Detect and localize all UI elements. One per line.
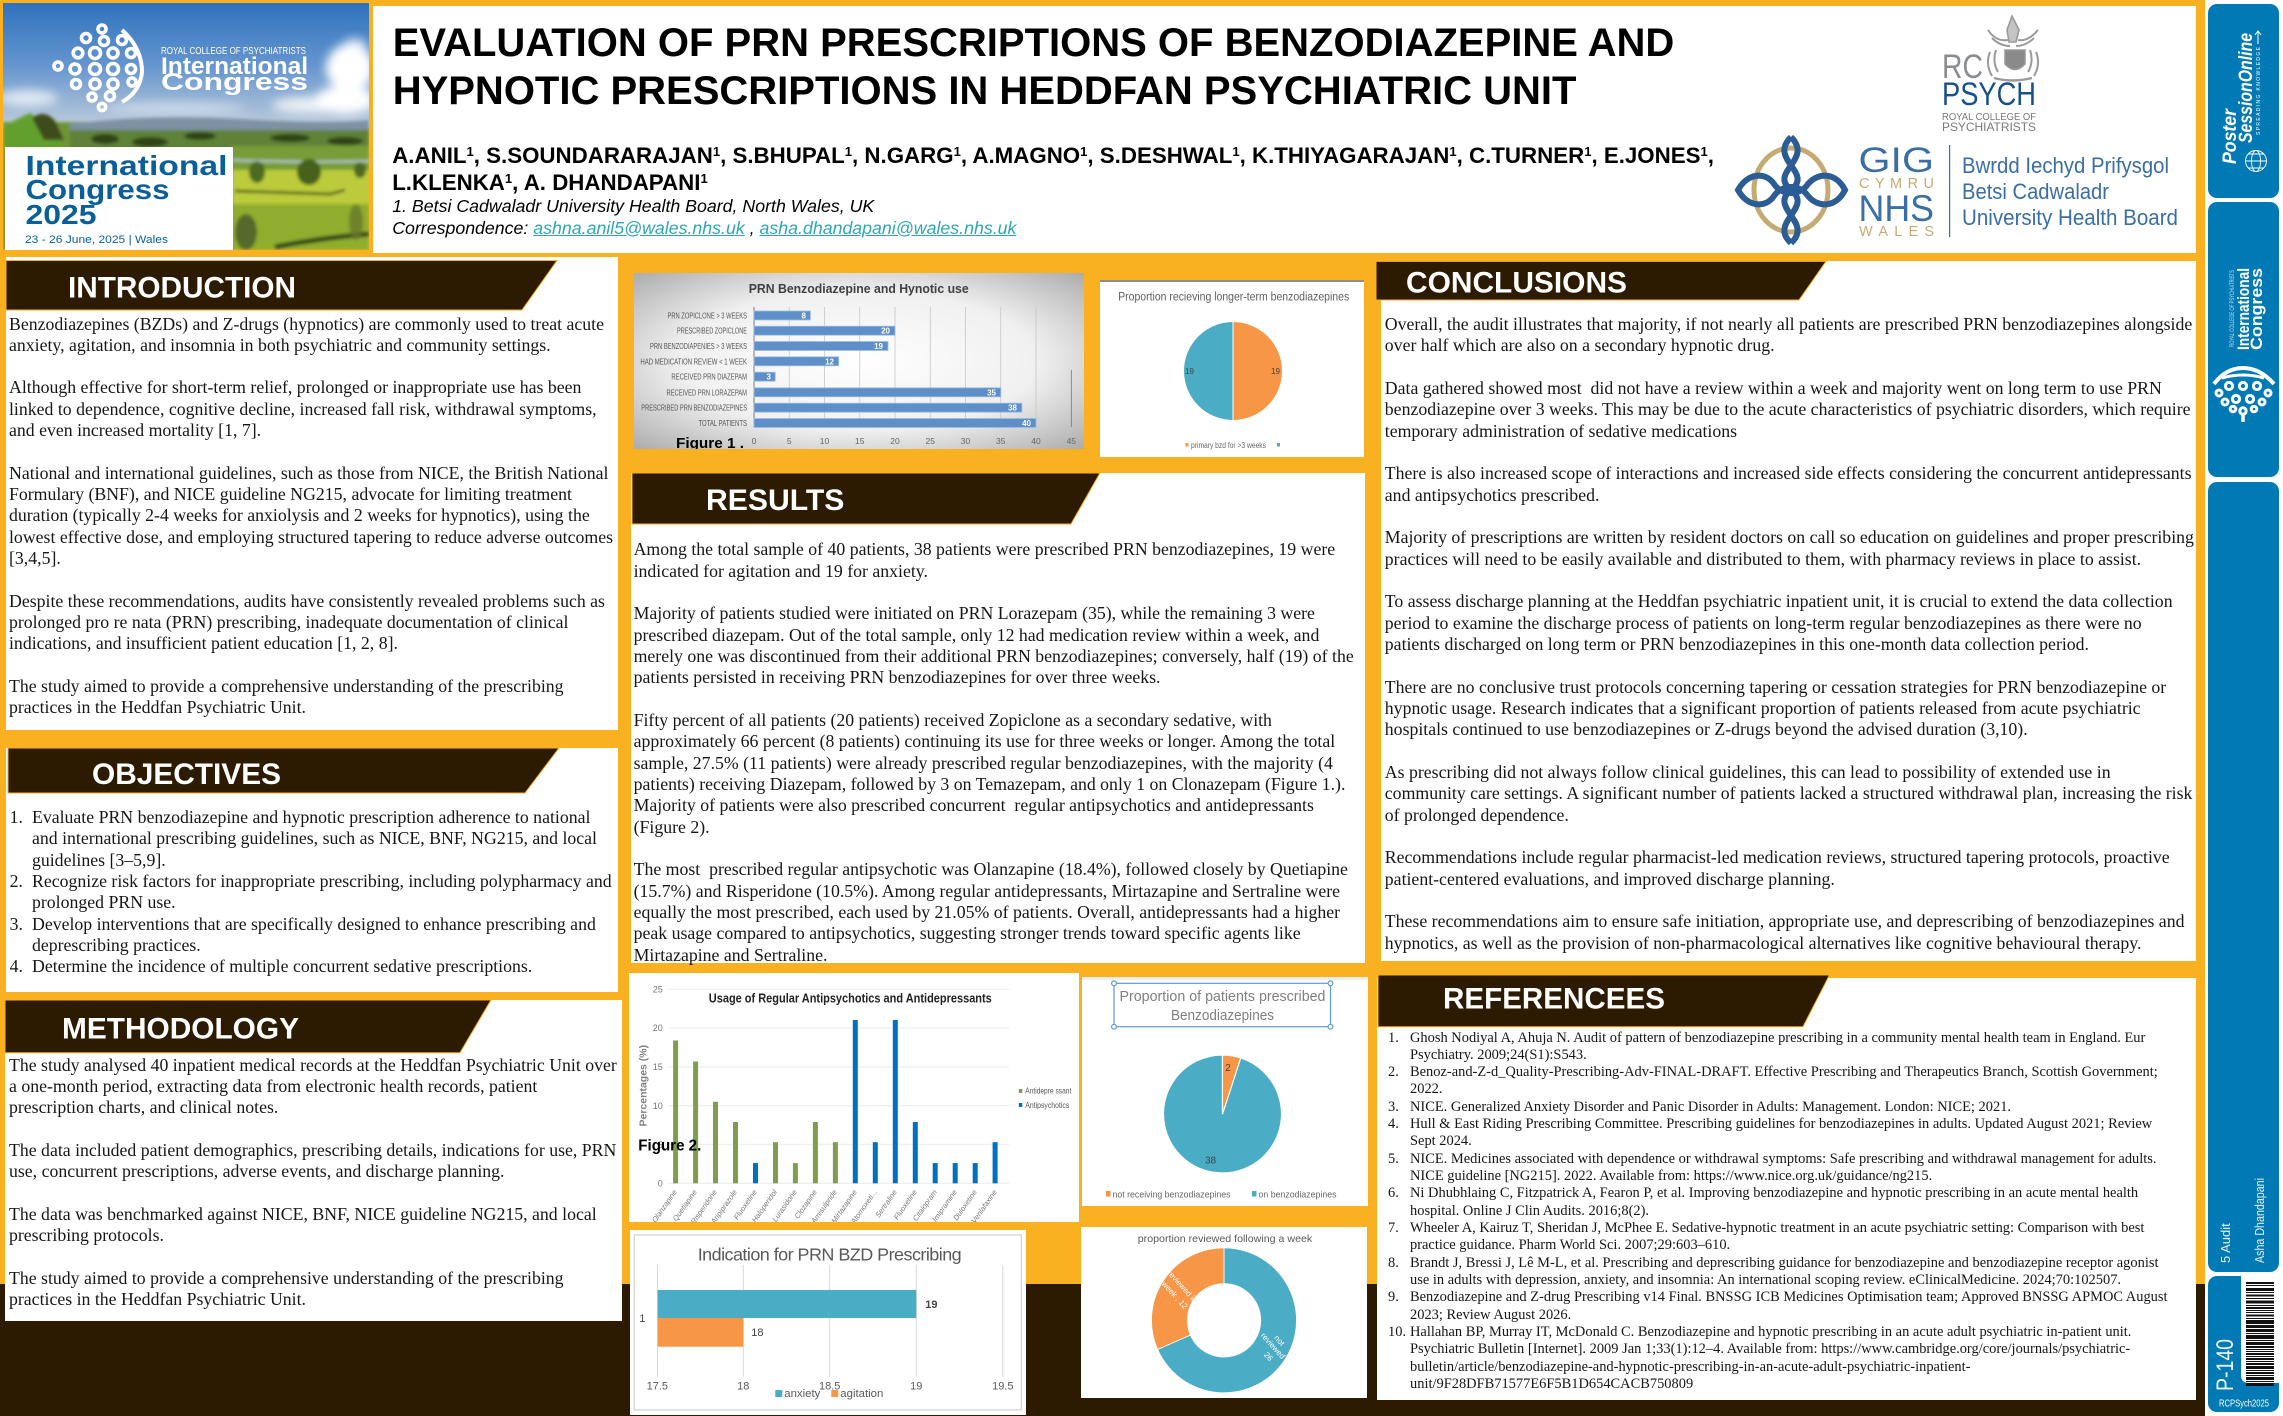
text: results body: sample, 27.5% (11 patients) were already prescribed regular benzodiazepines, with the majority (4	[634, 753, 1333, 773]
text: conclusions body: There are no conclusive trust protocols concerning tapering or cessation strategies for PRN benzodiazepine or	[1385, 677, 2166, 697]
text: references list: unit/9F28DFB71577E6F5B1D654CACB750809	[1410, 1376, 1693, 1392]
chart: figure 1 PRN benzodiazepine and hypnotic use bar chart: TOTAL PATIENTS	[698, 419, 747, 428]
chart: proportion reviewed following a week donut: 1 week , 12	[1155, 1274, 1189, 1311]
logo text: International Congress: International	[161, 53, 308, 80]
panel: references	[1377, 978, 2196, 1400]
chart: figure 2 usage of regular antipsychotics and antidepressants: Usage of Regular Antipsychotics and Antidepressants	[708, 992, 992, 1006]
logo: RCPsych: ROYAL COLLEGE OF	[1942, 112, 2036, 123]
chart: figure 2 usage of regular antipsychotics and antidepressants: Fluoxetine	[731, 1188, 759, 1221]
text: references list: use in adults with depression, anxiety, and insomnia: An international scoping review. eClinicalMedicine. 2024;70:102507.	[1410, 1272, 2121, 1288]
chart: indication for PRN BZD prescribing bar chart	[630, 1230, 1026, 1415]
panel: poster session online: Poster	[2220, 108, 2241, 164]
text: references list: 6.	[1388, 1185, 1399, 1201]
text: references list: 8.	[1388, 1255, 1399, 1271]
text: results body: Majority of patients were also prescribed concurrent regular antipsychotics and antidepressants	[634, 795, 1314, 815]
chart: figure 1 PRN benzodiazepine and hypnotic use bar chart: RECEIVED PRN LORAZEPAM	[666, 388, 747, 397]
chart: figure 1 PRN benzodiazepine and hypnotic use bar chart: PRESCRIBED ZOPICLONE	[677, 327, 747, 336]
chart: proportion of patients prescribed benzodiazepines pie: on benzodiazepines	[1258, 1190, 1336, 1200]
text: methodology body: The data included patient demographics, prescribing details, indications for use, PRN	[9, 1140, 616, 1160]
text: conclusions body: Overall, the audit illustrates that majority, if not nearly all patients are prescribed PRN benzodiazepines alongside	[1385, 314, 2192, 334]
chart: proportion receiving longer-term benzodiazepines pie	[1100, 280, 1364, 457]
logo text: GIG Cymru NHS Wales: NHS	[1858, 188, 1934, 229]
chart: proportion of patients prescribed benzodiazepines pie: not receiving benzodiazepines	[1112, 1190, 1230, 1200]
text: results body: indicated for agitation and 19 for anxiety.	[634, 561, 928, 581]
chart: indication for PRN BZD prescribing bar chart: anxiety	[784, 1388, 821, 1400]
chart: indication for PRN BZD prescribing bar chart: 19	[910, 1380, 922, 1392]
chart: figure 1 PRN benzodiazepine and hypnotic use bar chart: RECEIVED PRN DIAZEPAM	[671, 373, 747, 382]
heading: methodology: METHODOLOGY	[62, 1012, 299, 1045]
heading: introduction	[6, 260, 558, 310]
chart: proportion reviewed following a week donut: proportion reviewed following a week	[1137, 1233, 1313, 1244]
icon: barcode	[2246, 1282, 2274, 1386]
chart: figure 1 PRN benzodiazepine and hypnotic use bar chart	[634, 273, 1084, 449]
text: conclusions body: patient-centered evaluations, and improved discharge planning.	[1385, 869, 1835, 889]
text: results body: (Figure 2).	[634, 817, 710, 837]
text: conclusions body: community care settings. A significant number of patients lacked a structured withdrawal plan, increasing the risk	[1385, 783, 2192, 803]
chart: figure 2 usage of regular antipsychotics and antidepressants: Quetiapine	[670, 1188, 699, 1222]
chart: figure 1 PRN benzodiazepine and hypnotic use bar chart: 35	[987, 388, 997, 397]
chart: figure 2 usage of regular antipsychotics and antidepressants: 0	[657, 1178, 662, 1188]
chart: indication for PRN BZD prescribing bar chart: agitation	[840, 1388, 883, 1400]
text: references list: Hallahan BP, Murray IT, McDonald C. Benzodiazepine and hypnotic prescribing in an acute adult psychiatric in-patient unit.	[1410, 1324, 2131, 1340]
heading: conclusions	[1376, 261, 1827, 300]
text: objectives list: prolonged PRN use.	[32, 892, 176, 912]
text: conclusions body: and antipsychotics prescribed.	[1385, 485, 1599, 505]
text: results body: (15.7%) and Risperidone (10.5%). Among regular antidepressants, Mirtazapine and Sertraline were	[634, 881, 1340, 901]
chart: proportion of patients prescribed benzodiazepines pie: 38	[1204, 1156, 1216, 1166]
chart: proportion of patients prescribed benzodiazepines pie: 2	[1225, 1063, 1231, 1074]
logo: Betsi Cadwaladr University Health Board	[1734, 134, 2178, 246]
text: conclusions body	[1384, 314, 2194, 953]
chart: figure 1 PRN benzodiazepine and hypnotic use bar chart: 5	[787, 436, 792, 446]
heading: objectives: OBJECTIVES	[92, 758, 281, 791]
chart: figure 2 usage of regular antipsychotics and antidepressants: Antidepre ssant	[1025, 1087, 1072, 1096]
text: introduction body: [3,4,5].	[9, 548, 61, 568]
text: conclusions body: Data gathered showed most did not have a review within a week and majority went on long term to use PRN	[1385, 378, 2162, 398]
text: objectives list: 2.	[10, 871, 23, 891]
heading: references: REFERENCEES	[1443, 982, 1665, 1015]
chart: figure 2 usage of regular antipsychotics and antidepressants: Citalopram	[910, 1188, 939, 1222]
title: HYPNOTIC PRESCRIPTIONS IN HEDDFAN PSYCHIATRIC UNIT	[393, 69, 1576, 113]
panel: congress photo banner	[3, 3, 369, 250]
text: conclusions body: These recommendations aim to ensure safe initiation, appropriate use, and deprescribing of benzodiazepines and	[1385, 911, 2184, 931]
text: methodology body: prescription charts, and clinical notes.	[9, 1097, 278, 1117]
text: conclusions body: of prolonged dependence.	[1385, 805, 1569, 825]
chart: proportion reviewed following a week donut: reviewed ,	[1258, 1331, 1289, 1364]
text: references list: 2.	[1388, 1064, 1399, 1080]
text: objectives list: 3.	[10, 914, 23, 934]
text: conclusions body: hypnotic usage. Research indicates that a significant proportion of patients released from acute psychiatric	[1385, 698, 2141, 718]
logo text: International Congress	[161, 46, 308, 96]
text: conclusions body: As prescribing did not always follow clinical guidelines, this can lead to possibility of extended use in	[1385, 762, 2111, 782]
text: introduction body: linked to dependence, cognitive decline, increased fall risk, withdrawal symptoms,	[9, 399, 597, 419]
text: conclusions body: hypnotics, as well as the provision of non-pharmacological alternatives like cognitive behavioural therapy.	[1385, 933, 2141, 953]
authors: L.KLENKA1, A. DHANDAPANI1	[392, 170, 708, 194]
title: EVALUATION OF PRN PRESCRIPTIONS OF BENZODIAZEPINE AND	[393, 21, 1674, 65]
panel: international congress: Congress	[2247, 268, 2266, 350]
icon: congress logo	[2214, 368, 2274, 414]
text: conclusions body: To assess discharge planning at the Heddfan psychiatric inpatient unit, it is crucial to extend the data collection	[1385, 591, 2173, 611]
text: results body: prescribed diazepam. Out of the total sample, only 12 had medication review within a week, and	[634, 625, 1319, 645]
text: introduction body: lowest effective dose, and employing structured tapering to reduce adverse outcomes	[9, 527, 613, 547]
chart: figure 1 PRN benzodiazepine and hypnotic use bar chart: 10	[820, 436, 829, 446]
text: objectives list: 4.	[10, 956, 23, 976]
text: references list: 4.	[1388, 1116, 1399, 1132]
text: results body: The most prescribed regular antipsychotic was Olanzapine (18.4%), followed closely by Quetiapine	[634, 859, 1348, 879]
text: references list: practice guidance. Pharm World Sci. 2007;29:603–610.	[1410, 1237, 1730, 1253]
text: objectives list: deprescribing practices.	[32, 935, 201, 955]
text: methodology body	[9, 1055, 617, 1309]
panel: international congress: ROYAL COLLEGE OF PSYCHIATRISTS	[2230, 270, 2236, 347]
text: references list: 1.	[1388, 1030, 1399, 1046]
text: references list: NICE guideline [NG215]. 2022. Available from: https://www.nice.org.uk/guidance/ng215.	[1410, 1168, 1932, 1184]
text: conclusions body: patients discharged on long term or PRN benzodiazepines in this one-month data collection period.	[1385, 634, 2089, 654]
text: references list: Psychiatric Bulletin [Internet]. 2009 Jan 1;33(1):12–4. Available from: https://www.cambridge.org/core/journals/psychiatric-	[1410, 1341, 2130, 1357]
authors: A.ANIL1, S.SOUNDARARAJAN1, S.BHUPAL1, N.GARG1, A.MAGNO1, S.DESHWAL1, K.THIYAGARAJAN1, C.TURNER1, E.JONES1,	[392, 143, 1714, 168]
text: introduction body: National and international guidelines, such as those from NICE, the British National	[9, 463, 608, 483]
logo text: GIG Cymru NHS Wales: Betsi Cadwaladr	[1962, 179, 2109, 204]
chart: figure 1 PRN benzodiazepine and hypnotic use bar chart: PRN Benzodiazepine and Hynotic use	[749, 282, 969, 296]
text: references list: 7.	[1388, 1220, 1399, 1236]
chart: figure 1 PRN benzodiazepine and hypnotic use bar chart: 40	[1022, 419, 1032, 428]
text: introduction body: Benzodiazepines (BZDs) and Z-drugs (hypnotics) are commonly used to treat acute	[9, 314, 604, 334]
panel: poster number and barcode	[2208, 1276, 2279, 1412]
text: results body: equally the most prescribed, each used by 21.05% of patients. Overall, antidepressants had a higher	[634, 902, 1340, 922]
chart: figure 1 PRN benzodiazepine and hypnotic use bar chart: 12	[825, 357, 835, 366]
heading: introduction: INTRODUCTION	[68, 272, 296, 305]
text: references list: Benoz-and-Z-d_Quality-Prescribing-Adv-FINAL-DRAFT. Effective Prescribing and Therapeutics Branch, Scottish Government;	[1410, 1064, 2158, 1080]
text: introduction body: anxiety, agitation, and insomnia in both psychiatric and community settings.	[9, 335, 551, 355]
text: introduction body	[9, 314, 613, 717]
logo: RCPsych: PSYCHIATRISTS	[1942, 120, 2036, 134]
affiliation and correspondence	[392, 196, 1017, 238]
icon: globe	[2246, 150, 2266, 172]
logo text: GIG Cymru NHS Wales: University Health Board	[1962, 205, 2178, 230]
text: introduction body: Despite these recommendations, audits have consistently revealed problems such as	[9, 591, 605, 611]
chart: indication for PRN BZD prescribing bar chart: 18	[751, 1327, 763, 1339]
text: introduction body: practices in the Heddfan Psychiatric Unit.	[9, 697, 306, 717]
panel: right side strip	[2208, 4, 2279, 1412]
text: results body: Among the total sample of 40 patients, 38 patients were prescribed PRN benzodiazepines, 19 were	[634, 539, 1335, 559]
text: results body: Majority of patients studied were initiated on PRN Lorazepam (35), while the remaining 3 were	[634, 603, 1315, 623]
text: introduction body: The study aimed to provide a comprehensive understanding of the prescribing	[9, 676, 564, 696]
text: references list: Psychiatry. 2009;24(S1):S543.	[1410, 1047, 1587, 1063]
logo: RCPsych: RC	[1942, 48, 1983, 86]
chart: figure 1 PRN benzodiazepine and hypnotic use bar chart: 3	[767, 373, 772, 382]
text: references list: 5.	[1388, 1151, 1399, 1167]
text: conclusions body: There is also increased scope of interactions and increased side effects considering the concurrent antidepressants	[1385, 463, 2192, 483]
text: introduction body: Formulary (BNF), and NICE guideline NG215, advocate for limiting treatment	[9, 484, 572, 504]
chart: figure 1 PRN benzodiazepine and hypnotic use bar chart: 20	[881, 327, 891, 336]
text: references list: Brandt J, Bressi J, Lê M-L, et al. Prescribing and deprescribing guidance for benzodiazepine and benzodiazepine receptor agonist	[1410, 1255, 2158, 1271]
text: objectives list	[10, 807, 612, 976]
logo text: GIG Cymru NHS Wales: WALES	[1859, 224, 1934, 240]
panel: conclusions	[1381, 261, 2196, 961]
text: methodology body: The data was benchmarked against NICE, BNF, NICE guideline NG215, and local	[9, 1204, 597, 1224]
panel: session details	[2208, 482, 2279, 1272]
text: introduction body: Although effective for short-term relief, prolonged or inappropriate use has been	[9, 377, 581, 397]
logo text: GIG Cymru NHS Wales: CYMRU	[1859, 176, 1934, 192]
chart: figure 1 PRN benzodiazepine and hypnotic use bar chart: 25	[926, 436, 935, 446]
chart: figure 2 usage of regular antipsychotics and antidepressants: 5	[657, 1140, 662, 1150]
chart: figure 1 PRN benzodiazepine and hypnotic use bar chart: 45	[1067, 436, 1076, 446]
chart: figure 2 usage of regular antipsychotics and antidepressants: Duloxetine	[951, 1188, 979, 1222]
text: conclusions body: period to examine the discharge process of patients on long-term regular benzodiazepines as there were no	[1385, 613, 2142, 633]
chart: indication for PRN BZD prescribing bar chart: 19	[925, 1299, 937, 1311]
chart: proportion reviewed following a week donut: 26	[1262, 1350, 1275, 1363]
callout: selected title box: Benzodiazepines	[1170, 1008, 1274, 1024]
chart: figure 1 PRN benzodiazepine and hypnotic use bar chart: 8	[802, 312, 807, 320]
chart: figure 1 PRN benzodiazepine and hypnotic use bar chart: 20	[890, 436, 900, 446]
chart: indication for PRN BZD prescribing bar chart: 17.5	[646, 1380, 668, 1392]
text: results body: peak usage compared to antipsychotics, suggesting stronger trends toward specific agents like	[634, 923, 1301, 943]
text: methodology body: a one-month period, extracting data from electronic health records, patient	[9, 1076, 537, 1096]
panel: session details: 5 Audit	[2218, 1223, 2233, 1263]
text: conclusions body: benzodiazepine over 3 weeks. This may be due to the acute characteristics of psychiatric disorders, which require	[1385, 399, 2191, 419]
chart: indication for PRN BZD prescribing bar chart: 18	[737, 1380, 749, 1392]
chart: proportion of patients prescribed benzodiazepines pie	[1082, 977, 1368, 1206]
logo text: International Congress: Congress	[161, 69, 308, 96]
text: results body: patients persisted in receiving PRN benzodiazepines for over three weeks.	[634, 667, 1160, 687]
text: references list: Ni Dhubhlaing C, Fitzpatrick A, Fearon P, et al. Improving benzodiazepine and hypnotic prescribing in an acute mental health	[1410, 1185, 2138, 1201]
callout: congress dates box: 23 - 26 June, 2025 | Wales	[25, 234, 169, 246]
text: references list: Sept 2024.	[1410, 1133, 1472, 1149]
text: methodology body: The study analysed 40 inpatient medical records at the Heddfan Psychiatric Unit over	[9, 1055, 617, 1075]
text: references list: NICE. Generalized Anxiety Disorder and Panic Disorder in Adults: Management. London: NICE; 2021.	[1410, 1099, 2011, 1115]
text: introduction body: prolonged pro re nata (PRN) prescribing, inadequate documentation of clinical	[9, 612, 568, 632]
panel: poster session online	[2208, 4, 2279, 198]
text: conclusions body: temporary administration of sedative medications	[1385, 421, 1737, 441]
chart: figure 1 PRN benzodiazepine and hypnotic use bar chart: 15	[855, 436, 865, 446]
chart: figure 1 PRN benzodiazepine and hypnotic use bar chart: PRN BENZODIAPENIES > 3 WEEKS	[650, 342, 747, 351]
heading: conclusions: CONCLUSIONS	[1406, 267, 1627, 300]
chart: figure 2 usage of regular antipsychotics and antidepressants	[629, 973, 1079, 1222]
heading: results	[632, 473, 1100, 524]
chart: figure 2 usage of regular antipsychotics and antidepressants: Clozapine	[792, 1188, 819, 1220]
callout: congress dates box: 2025	[26, 199, 96, 230]
chart: figure 1 PRN benzodiazepine and hypnotic use bar chart: HAD MEDICATION REVIEW < 1 WEEK	[640, 357, 747, 366]
logo text: GIG Cymru NHS Wales: GIG	[1858, 141, 1934, 180]
chart: figure 1 PRN benzodiazepine and hypnotic use bar chart: 30	[961, 436, 970, 446]
panel: poster number and barcode: RCPSych2025	[2219, 1398, 2269, 1410]
chart: proportion receiving longer-term benzodiazepines pie: 19	[1271, 367, 1280, 376]
text: objectives list: guidelines [3–5,9].	[32, 850, 166, 870]
chart: figure 1 PRN benzodiazepine and hypnotic use bar chart: 40	[1031, 436, 1041, 446]
panel: poster number and barcode: P-140	[2212, 1339, 2239, 1391]
text: objectives list: Determine the incidence of multiple concurrent sedative prescriptions.	[32, 956, 532, 976]
text: objectives list: Develop interventions that are specifically designed to enhance prescribing and	[32, 914, 596, 934]
text: methodology body: prescribing protocols.	[9, 1225, 164, 1245]
callout: congress dates box: International	[26, 150, 227, 181]
chart: indication for PRN BZD prescribing bar chart: 1	[639, 1313, 645, 1325]
chart: proportion reviewed following a week donut: not	[1272, 1333, 1286, 1348]
text: references list: bulletin/article/benzodiazepine-and-hypnotic-prescribing-in-an-acute-adult-psychiatric-inpatient-	[1410, 1359, 1970, 1375]
panel: results	[631, 473, 1365, 963]
text: references list: 2022.	[1410, 1081, 1442, 1097]
text: conclusions body: Majority of prescriptions are written by resident doctors on call so education on guidelines and proper prescribing	[1385, 527, 2194, 547]
logo text: GIG Cymru NHS Wales: Bwrdd Iechyd Prifysgol	[1962, 153, 2169, 178]
panel: objectives	[6, 748, 618, 992]
chart: figure 1 PRN benzodiazepine and hypnotic use bar chart: 0	[752, 436, 757, 446]
icon: congress brain logo	[54, 25, 142, 111]
chart: indication for PRN BZD prescribing bar chart: Indication for PRN BZD Prescribing	[697, 1245, 961, 1265]
affiliation and correspondence: Correspondence: ashna.anil5@wales.nhs.uk , asha.dhandapani@wales.nhs.uk	[392, 218, 1016, 238]
logo text: GIG Cymru NHS Wales	[1858, 141, 2178, 240]
text: methodology body: practices in the Heddfan Psychiatric Unit.	[9, 1289, 306, 1309]
chart: figure 2 usage of regular antipsychotics and antidepressants: 10	[652, 1101, 662, 1111]
text: objectives list: Recognize risk factors for inappropriate prescribing, including polypharmacy and	[32, 871, 612, 891]
panel: poster session online: SessionOnline	[2236, 33, 2257, 143]
text: results body	[634, 539, 1354, 965]
text: objectives list: Evaluate PRN benzodiazepine and hypnotic prescription adherence to national	[32, 807, 590, 827]
text: objectives list: and international prescribing guidelines, such as NICE, BNF, NG215, and local	[32, 828, 597, 848]
text: results body: Mirtazapine and Sertraline.	[634, 945, 827, 965]
heading: objectives	[8, 748, 560, 794]
text: objectives list: 1.	[10, 807, 23, 827]
callout: selected title box	[1111, 981, 1332, 1029]
text: references list: NICE. Medicines associated with dependence or withdrawal symptoms: Safe prescribing and withdrawal management for adults.	[1410, 1151, 2157, 1167]
text: references list: Ghosh Nodiyal A, Ahuja N. Audit of pattern of benzodiazepine prescribing in a community mental health team in England. Eur	[1410, 1030, 2145, 1046]
text: conclusions body: practices will need to be easily available and distributed to them, with pharmacy reviews in place to assist.	[1385, 549, 2141, 569]
text: references list: Hull & East Riding Prescribing Committee. Prescribing guidelines for benzodiazepines in adults. Updated August 2021; Review	[1410, 1116, 2152, 1132]
authors	[392, 143, 1714, 194]
text: introduction body: and even increased mortality [1, 7].	[9, 420, 261, 440]
chart: indication for PRN BZD prescribing bar chart: 19.5	[992, 1380, 1013, 1392]
text: references list: Benzodiazepine and Z-drug Prescribing v14 Final. BNSSG ICB Medicines Optimisation team; Approved BNSSG APMOC August	[1410, 1289, 2168, 1305]
panel: title header	[373, 6, 2196, 253]
panel: international congress	[2208, 202, 2279, 477]
text: results body: approximately 66 percent (8 patients) continuing its use for three weeks or longer. Among the total	[634, 731, 1335, 751]
text: conclusions body: hospitals continued to use benzodiazepines or Z-drugs beyond the advised duration (3,10).	[1385, 719, 2028, 739]
panel: poster session online: SPREADING KNOWLEDGE	[2256, 46, 2262, 135]
chart: figure 2 usage of regular antipsychotics and antidepressants: Fluoxetine	[891, 1188, 919, 1221]
chart: proportion receiving longer-term benzodiazepines pie: 19	[1185, 367, 1194, 376]
text: methodology body: The study aimed to provide a comprehensive understanding of the prescribing	[9, 1268, 564, 1288]
chart: figure 2 usage of regular antipsychotics and antidepressants: 20	[652, 1023, 662, 1033]
chart: figure 1 PRN benzodiazepine and hypnotic use bar chart: PRN ZOPICLONE > 3 WEEKS	[668, 311, 747, 320]
heading: methodology	[5, 1000, 492, 1054]
title	[393, 21, 1674, 113]
text: references list	[1388, 1030, 2168, 1392]
heading: results: RESULTS	[706, 484, 844, 517]
text: introduction body: duration (typically 2-4 weeks for anxiolysis and 2 weeks for hypnotics), using the	[9, 505, 590, 525]
panel: session details: Asha Dhandapani	[2252, 1178, 2267, 1263]
panel: introduction	[6, 257, 618, 730]
panel: international congress: International	[2234, 268, 2253, 350]
callout: congress dates box	[5, 147, 233, 250]
text: references list: Wheeler A, Kairuz T, Sheridan J, McPhee E. Sedative-hypnotic treatment in an acute psychiatric setting: Comparison with best	[1410, 1220, 2144, 1236]
text: results body: patients) receiving Diazepam, followed by 3 on Temazepam, and only 1 on Clonazepam (Figure 1.).	[634, 774, 1345, 794]
dark poster footer band	[0, 1284, 2205, 1416]
chart: figure 2 usage of regular antipsychotics and antidepressants: Antipsychotics	[1025, 1101, 1069, 1110]
chart: indication for PRN BZD prescribing bar chart: 18.5	[819, 1380, 840, 1392]
callout: congress dates box: Congress	[26, 174, 170, 205]
panel: methodology	[5, 1000, 622, 1321]
text: references list: 2023; Review August 2026.	[1410, 1307, 1571, 1323]
logo text: International Congress: ROYAL COLLEGE OF PSYCHIATRISTS	[161, 46, 306, 57]
heading: references	[1378, 976, 1829, 1028]
chart: proportion reviewed following a week donut: reviewed in	[1165, 1268, 1199, 1304]
text: references list: 10.	[1388, 1324, 1406, 1340]
chart: figure 2 usage of regular antipsychotics and antidepressants: Percentages (%)	[638, 1045, 649, 1126]
chart: figure 1 PRN benzodiazepine and hypnotic use bar chart: 38	[1008, 404, 1018, 413]
text: introduction body: indications, and insufficient patient education [1, 2, 8].	[9, 633, 398, 653]
chart: figure 2 usage of regular antipsychotics and antidepressants: 25	[652, 985, 662, 995]
text: conclusions body: Recommendations include regular pharmacist-led medication reviews, structured tapering protocols, proactive	[1385, 847, 2170, 867]
chart: figure 2 usage of regular antipsychotics and antidepressants: 15	[652, 1062, 662, 1072]
icon: RCPsych crest	[1988, 16, 2038, 80]
chart: proportion reviewed following a week donut	[1081, 1227, 1367, 1398]
text: results body: Fifty percent of all patients (20 patients) received Zopiclone as a secondary sedative, with	[634, 710, 1272, 730]
chart: figure 2 usage of regular antipsychotics and antidepressants: Figure 2.	[638, 1137, 701, 1154]
chart: figure 1 PRN benzodiazepine and hypnotic use bar chart: PRESCRIBED PRN BENZODIAZEPINES	[641, 404, 747, 413]
text: references list: 9.	[1388, 1289, 1399, 1305]
text: conclusions body: over half which are also on a secondary hypnotic drug.	[1385, 335, 1775, 355]
chart: figure 1 PRN benzodiazepine and hypnotic use bar chart: 19	[874, 342, 884, 351]
text: references list: hospital. Online J Clin Audits. 2016;8(2).	[1410, 1203, 1649, 1219]
chart: proportion receiving longer-term benzodiazepines pie: primary bzd for >3 weeks	[1191, 441, 1266, 450]
text: results body: merely one was discontinued from their additional PRN benzodiazepines; conversely, half (19) of the	[634, 646, 1354, 666]
logo: RCPsych	[1942, 14, 2040, 134]
callout: selected title box: Proportion of patients prescribed	[1119, 989, 1325, 1005]
text: references list: 3.	[1388, 1099, 1399, 1115]
chart: figure 1 PRN benzodiazepine and hypnotic use bar chart: 35	[996, 436, 1006, 446]
text: methodology body: use, concurrent prescriptions, adverse events, and discharge planning.	[9, 1161, 504, 1181]
affiliation and correspondence: 1. Betsi Cadwaladr University Health Board, North Wales, UK	[392, 196, 874, 216]
chart: figure 2 usage of regular antipsychotics and antidepressants: Sertraline	[873, 1188, 899, 1219]
icon: celtic knot	[1738, 137, 1845, 243]
